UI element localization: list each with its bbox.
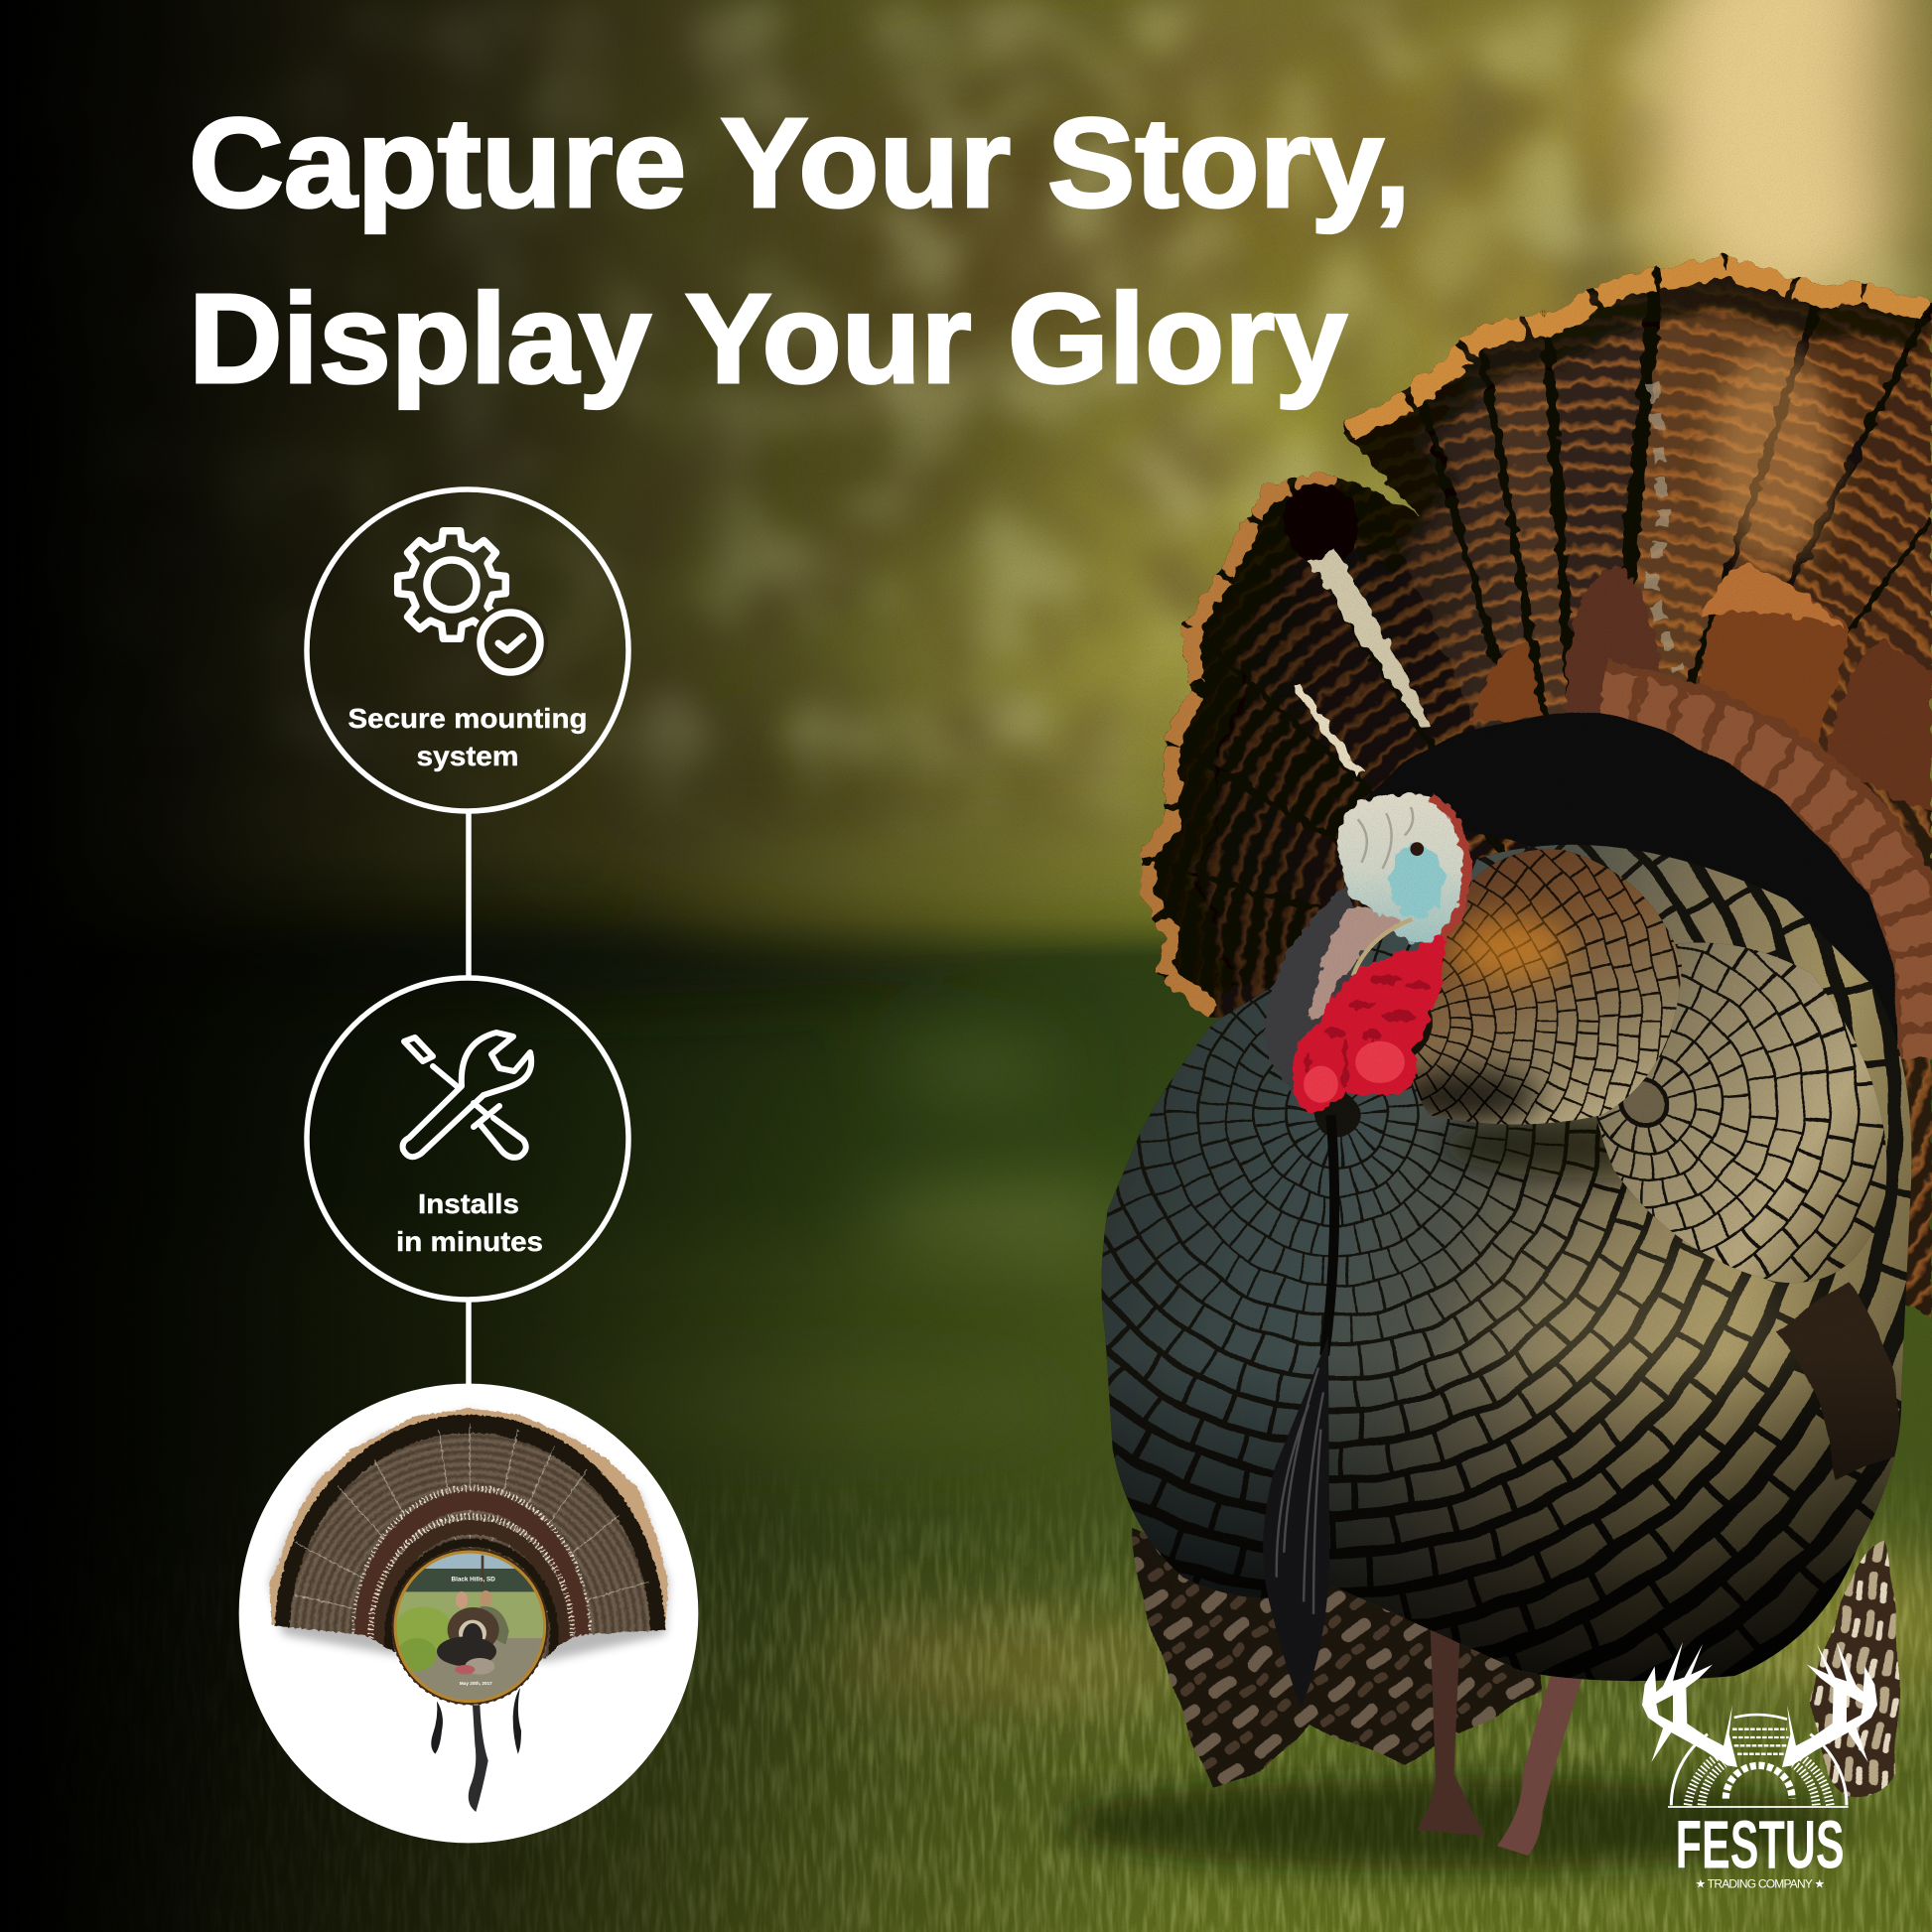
rust tail coverts bbox=[1472, 564, 1932, 1059]
logo: Festus Trading Company bbox=[1642, 1642, 1877, 1891]
neck bbox=[1263, 881, 1355, 1103]
product circle: turkey fan photo mount bbox=[239, 1384, 698, 1855]
head bbox=[1309, 794, 1467, 1019]
black feather tip bbox=[1270, 470, 1372, 577]
title: Capture Your Story, bbox=[189, 92, 1411, 234]
wordmark: ★ TRADING COMPANY ★ bbox=[1695, 1877, 1826, 1891]
icon: gear with check mark bbox=[398, 531, 548, 680]
feature: secure mounting system bbox=[307, 489, 628, 811]
photo medallion: May 20th, 2017 bbox=[460, 1681, 492, 1686]
beard bbox=[1263, 1337, 1329, 1707]
label: Installs bbox=[418, 1188, 519, 1219]
wordmark bbox=[1676, 1807, 1845, 1891]
title: Display Your Glory bbox=[189, 268, 1347, 410]
feather fan bbox=[261, 1403, 678, 1855]
label: Secure mounting bbox=[347, 703, 588, 734]
connector lines bbox=[466, 811, 472, 1386]
feature: installs in minutes bbox=[307, 978, 628, 1300]
label: in minutes bbox=[396, 1226, 543, 1257]
black neck ruff bbox=[1343, 711, 1898, 1059]
lower barred tail feathers bbox=[1134, 1528, 1898, 1799]
label bbox=[396, 1188, 543, 1257]
fan emblem bbox=[1668, 1715, 1849, 1807]
pale wing stripes bbox=[1309, 548, 1432, 730]
icon: crossed wrench and screwdriver bbox=[403, 1033, 531, 1158]
legs bbox=[1417, 1601, 1585, 1856]
hanging beards bbox=[431, 1688, 521, 1812]
antlers bbox=[1642, 1642, 1877, 1767]
upper right feather swirl bbox=[1596, 943, 1886, 1283]
turkey photograph bbox=[1050, 252, 1932, 1888]
photo medallion: Black Hills, SD bbox=[452, 1577, 495, 1584]
label: system bbox=[417, 741, 518, 771]
photo medallion bbox=[392, 1549, 548, 1705]
chest feathers bbox=[1092, 722, 1701, 1323]
title bbox=[189, 92, 1411, 410]
red wattle bbox=[1293, 934, 1446, 1112]
body plumage bbox=[1102, 844, 1912, 1682]
tail fan bbox=[1139, 252, 1932, 1318]
label bbox=[347, 703, 588, 771]
pale central chain bbox=[1651, 382, 1678, 671]
